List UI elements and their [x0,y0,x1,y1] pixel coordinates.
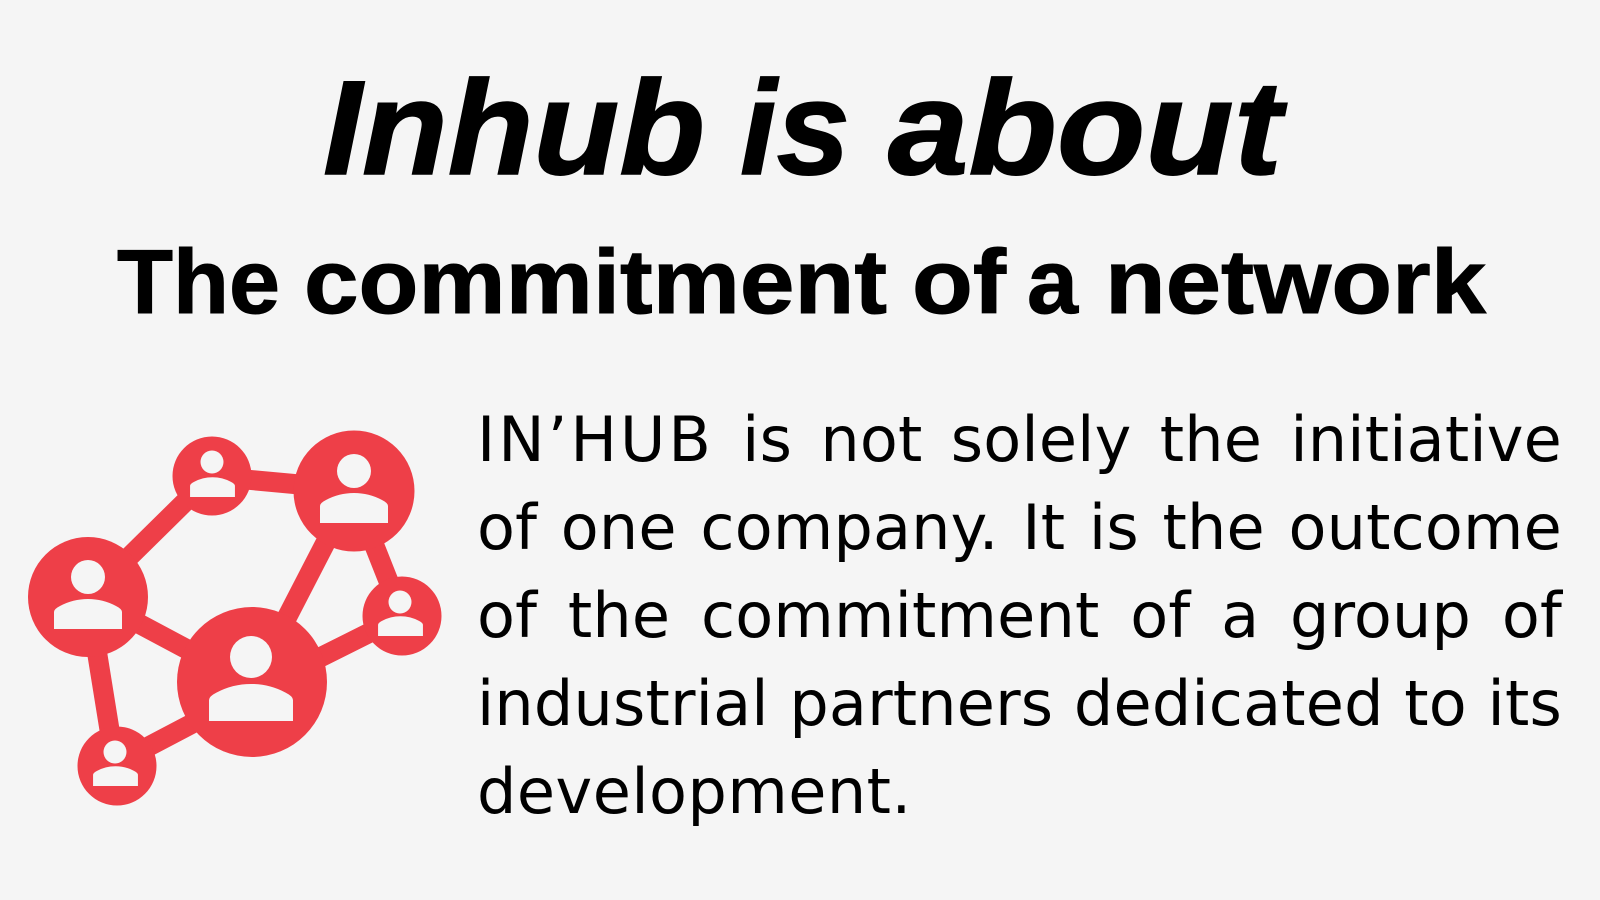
node: top right person [294,430,414,552]
body text block [477,403,1563,828]
icon: people network [28,430,442,806]
body text block: development. [477,755,912,828]
title: about [888,54,1288,203]
node: right person [362,576,442,656]
title: Inhub [323,54,705,203]
title: is [740,54,850,203]
node: left person [28,537,148,657]
subtitle: commitment [304,232,887,333]
subtitle: network [1105,232,1486,333]
subtitle [117,232,1486,333]
node: bottom person [78,726,156,806]
body text block: IN’HUB is not solely the initiative [477,403,1562,476]
subtitle: The [117,232,280,333]
title [323,54,1288,203]
node: central person [177,607,327,757]
network connectors [96,479,392,751]
subtitle: a [1027,232,1079,333]
body text block: industrial partners dedicated to its [477,667,1562,740]
body text block: of one company. It is the outcome [477,491,1562,564]
subtitle: of [912,232,1007,333]
body text block: of the commitment of a group of [477,579,1562,652]
node: top person [172,436,252,516]
